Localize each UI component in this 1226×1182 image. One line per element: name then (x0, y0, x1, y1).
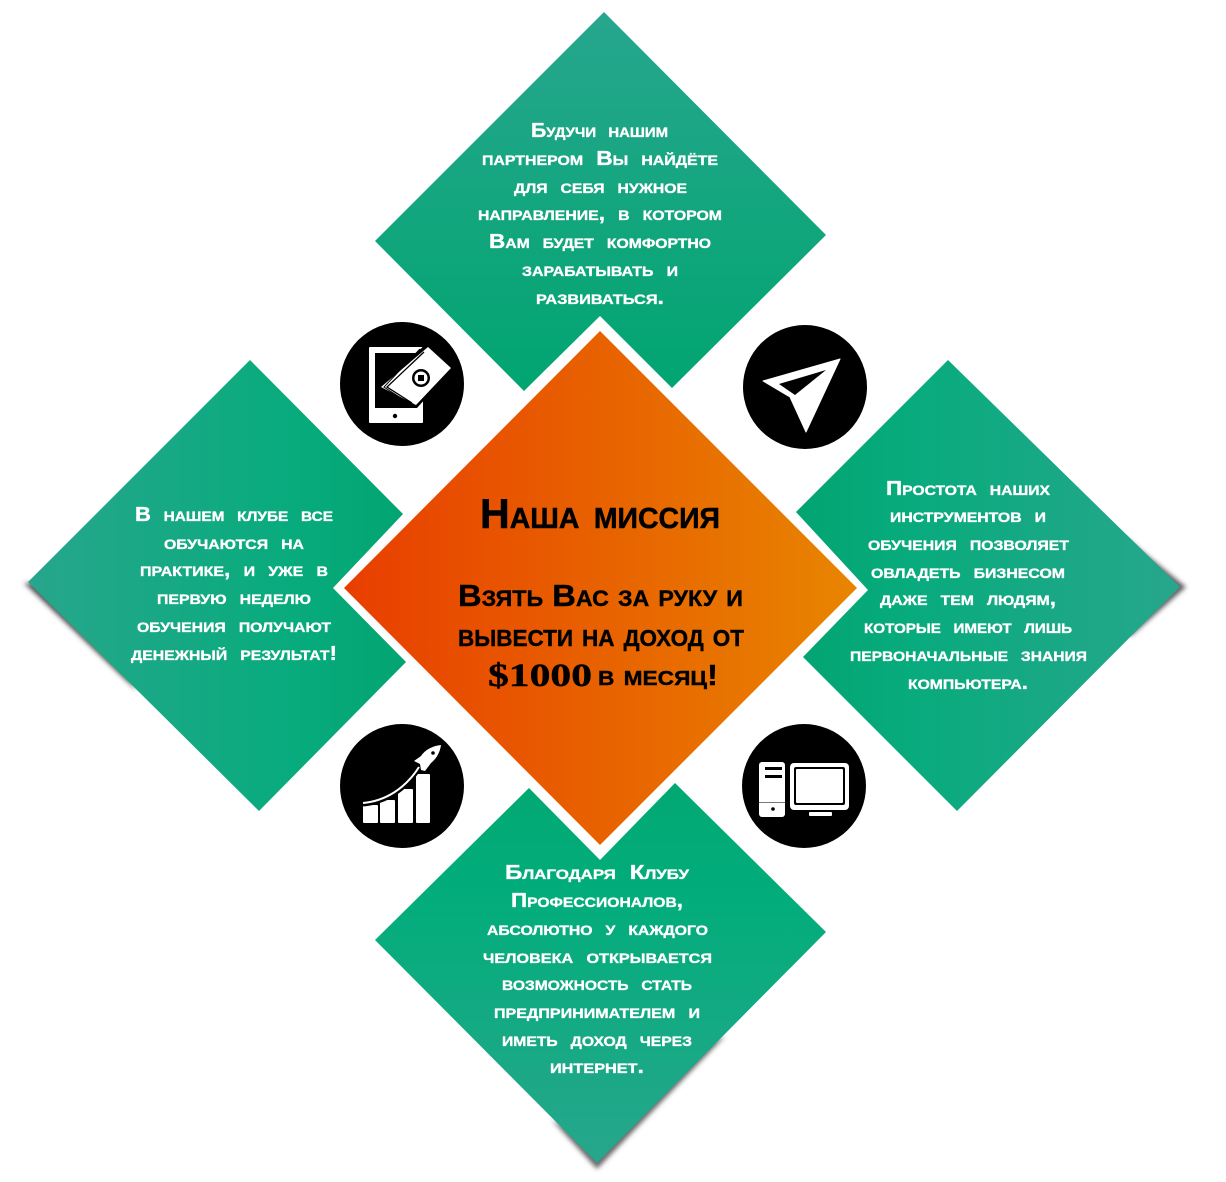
panel: right diamond (796, 360, 1180, 811)
text: left diamond: первую неделю (157, 587, 311, 609)
text: bottom diamond: интернет. (550, 1056, 644, 1078)
text: left diamond (131, 504, 337, 665)
icon: paper plane (743, 325, 867, 449)
icon: desktop computer (742, 724, 866, 848)
text: top diamond: партнером Вы найдёте (482, 148, 718, 170)
text: bottom diamond: возможность стать (502, 973, 692, 995)
text: right diamond: Простота наших (886, 478, 1051, 500)
text: top diamond: для себя нужное (514, 176, 687, 198)
icon: tablet with money (340, 322, 464, 446)
panel: top diamond (375, 12, 826, 391)
panel: left diamond (28, 360, 406, 811)
text: mission statement: в месяц! (598, 660, 718, 692)
text: bottom diamond: предпринимателем и (494, 1001, 700, 1023)
text: bottom diamond: абсолютно у каждого (487, 918, 708, 940)
text: right diamond: которые имеют лишь (864, 616, 1072, 638)
text: top diamond: Будучи нашим (531, 120, 668, 142)
text: top diamond (478, 120, 722, 309)
text: bottom diamond: иметь доход через (502, 1029, 692, 1051)
text: top diamond: развиваться. (536, 287, 664, 309)
text: right diamond: первоначальные знания (850, 644, 1087, 666)
text: bottom diamond: Благодаря Клубу (505, 862, 689, 884)
text: left diamond: обучения получают (137, 615, 331, 637)
diamond shadows (24, 537, 1186, 1169)
text: mission statement: Взять Вас за руку и (458, 578, 743, 613)
text: mission statement (458, 578, 744, 694)
panel: bottom diamond (375, 783, 826, 1163)
text: right diamond: инструментов и (890, 505, 1046, 527)
panel: central orange diamond (344, 331, 857, 845)
text: right diamond: обучения позволяет (868, 533, 1069, 555)
text: bottom diamond: Профессионалов, (511, 890, 683, 912)
text: bottom diamond (483, 862, 712, 1078)
text: left diamond: денежный результат! (131, 643, 337, 665)
text: left diamond: обучаются на (164, 532, 304, 554)
text: right diamond: овладеть бизнесом (871, 561, 1065, 583)
text: right diamond (850, 478, 1087, 694)
text: top diamond: зарабатывать и (522, 259, 678, 281)
text: top diamond: направление, в котором (478, 203, 722, 225)
icon: growth chart with rocket (340, 724, 464, 848)
text: top diamond: Вам будет комфортно (489, 231, 711, 253)
text: left diamond: В нашем клубе все (135, 504, 333, 526)
text: right diamond: даже тем людям, (880, 588, 1056, 610)
text: mission statement: $1000 (488, 658, 592, 694)
heading: mission: Наша миссия (480, 490, 720, 537)
text: mission statement: вывести на доход от (458, 616, 744, 653)
text: left diamond: практике, и уже в (140, 559, 328, 581)
text: bottom diamond: человека открывается (483, 946, 712, 968)
text: right diamond: компьютера. (908, 672, 1028, 694)
